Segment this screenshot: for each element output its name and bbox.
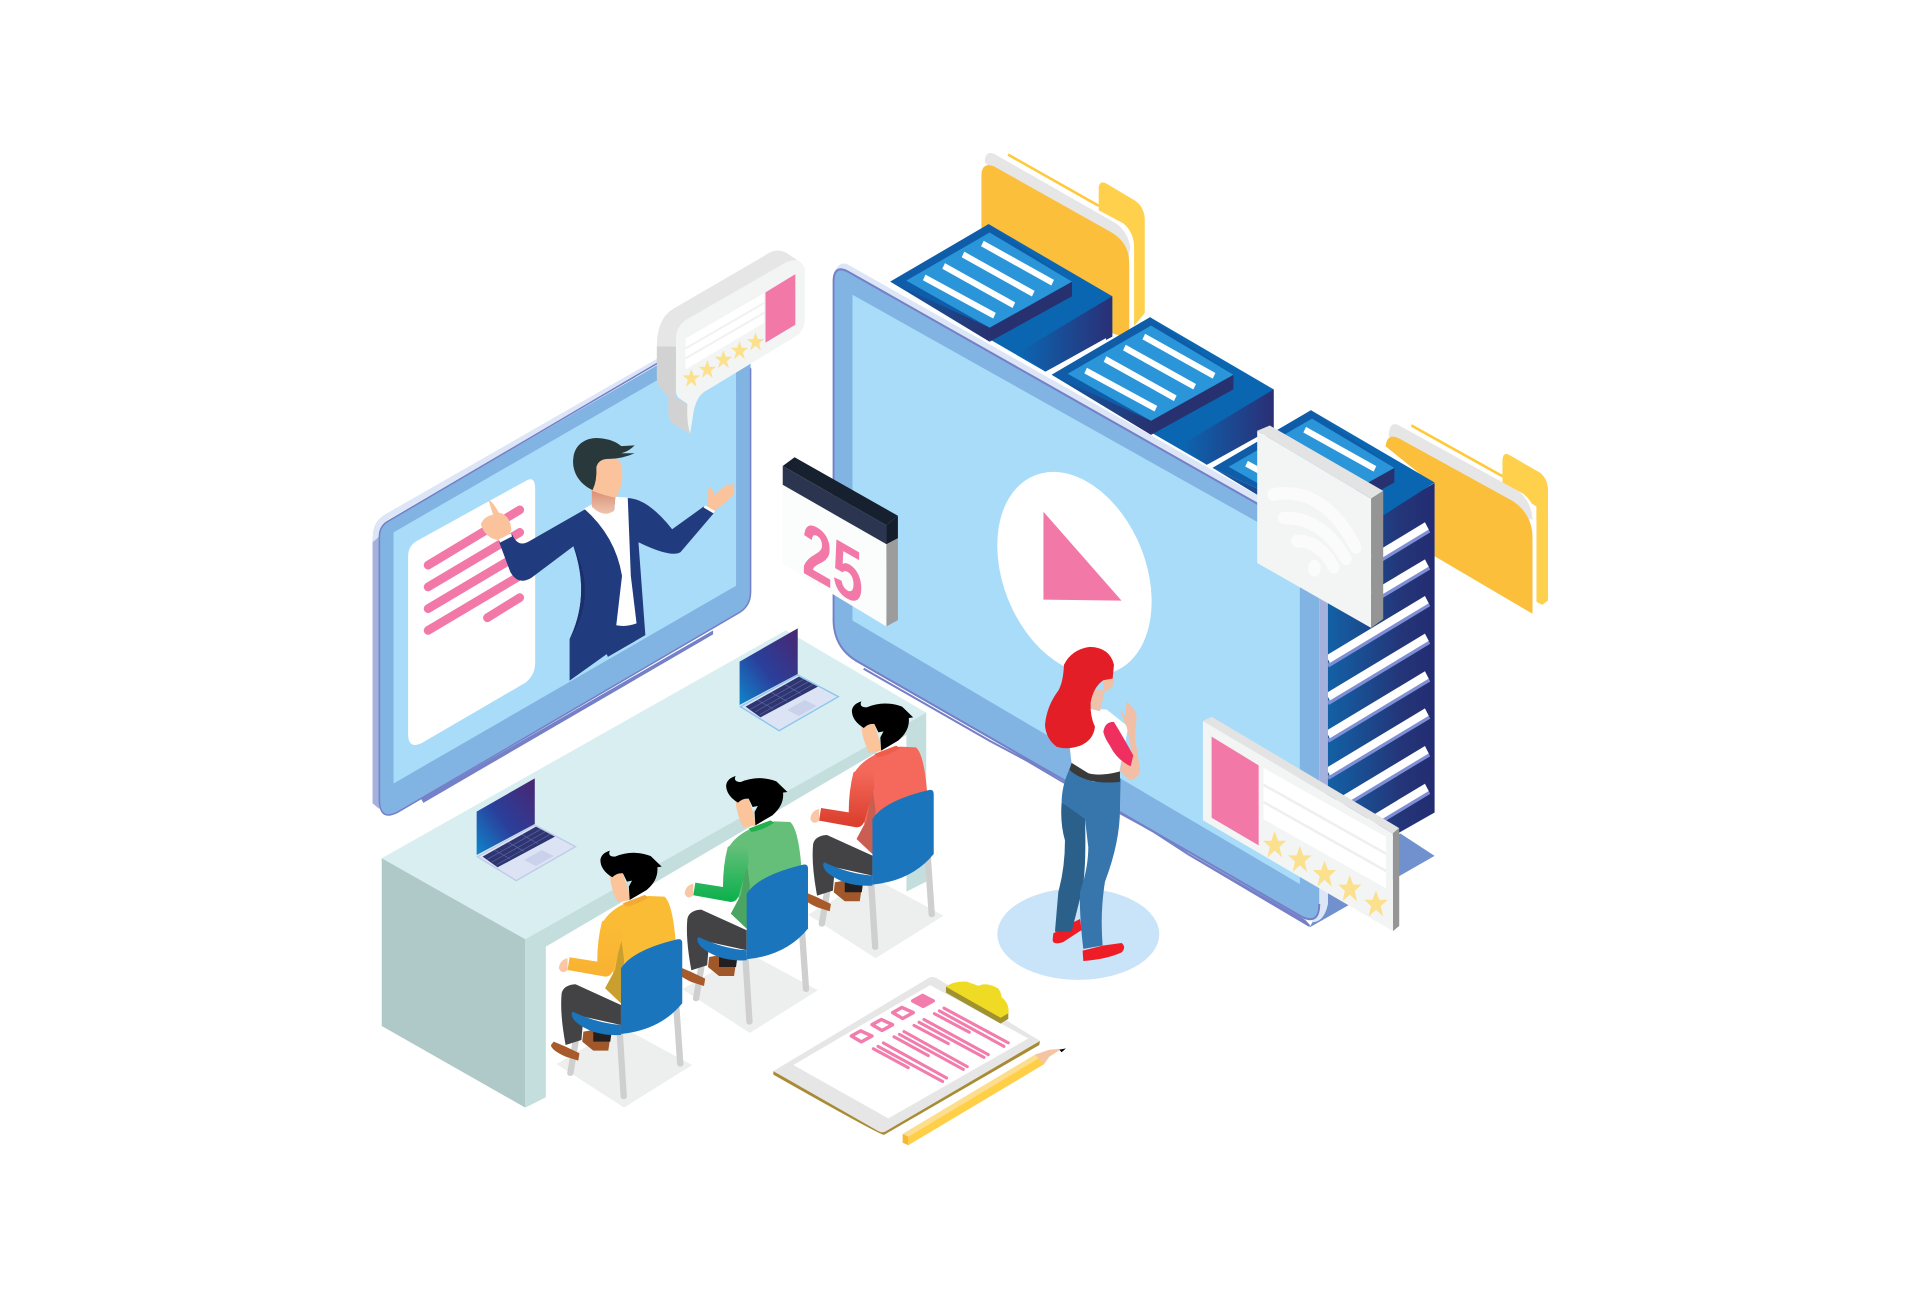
lid front right: [990, 282, 1072, 342]
torso shade: [731, 862, 750, 929]
bubble stars: [682, 332, 764, 387]
lid lines: [924, 243, 1053, 316]
lid lines: [1086, 337, 1214, 409]
server unit 3: [1213, 410, 1435, 528]
floor shadow: [1310, 833, 1435, 928]
card top: [1257, 425, 1383, 499]
server unit 2: [1052, 317, 1274, 469]
card text block: [1264, 768, 1386, 888]
checklist lines: [873, 1008, 1008, 1081]
rack slots: [1328, 526, 1429, 853]
play button circle: [967, 444, 1182, 703]
chair shadow: [557, 1027, 692, 1108]
face: [1103, 677, 1114, 692]
arm: [568, 910, 623, 977]
near foot: [551, 1042, 579, 1061]
calendar date: 25: [802, 503, 863, 623]
pencil body: [908, 1057, 1044, 1145]
card stars: [1263, 831, 1388, 917]
checked box: [913, 995, 933, 1006]
pencil: [903, 1048, 1066, 1145]
clip: [946, 982, 1009, 1019]
calendar page: [783, 485, 886, 626]
hand: [559, 958, 568, 972]
chair back: [872, 790, 934, 885]
monitor bezel: [379, 311, 751, 815]
chair legs: [696, 932, 806, 1022]
speech bubble with rating: [657, 251, 805, 434]
calendar header: [783, 466, 886, 544]
teacher figure: [481, 438, 734, 681]
unit side: [1180, 389, 1274, 465]
pencil tip: [1035, 1049, 1062, 1064]
far foot: [708, 955, 737, 976]
monitor top lip: [373, 358, 658, 542]
folder back tab: [1099, 182, 1145, 328]
panel: server, folders and right monitor: [834, 153, 1548, 931]
calendar top: [783, 457, 898, 525]
sock: [593, 1028, 612, 1042]
bubble text rules: [686, 303, 764, 358]
trousers: [687, 910, 747, 970]
laptop base: [740, 675, 838, 731]
lid lines: [1247, 430, 1375, 502]
floor circle: [997, 888, 1159, 980]
laptop screen: [740, 628, 798, 705]
teacher shirt: [584, 497, 637, 626]
near foot: [802, 892, 831, 911]
hand: [685, 884, 693, 897]
slot strip: [1044, 338, 1106, 376]
far foot: [582, 1030, 611, 1051]
far foot: [834, 881, 863, 901]
chair shadow: [682, 952, 818, 1033]
unit top: [1052, 317, 1274, 465]
laptop left: [477, 778, 575, 881]
lid face: [1229, 419, 1394, 514]
jeans front: [1062, 768, 1121, 949]
face: [610, 873, 631, 902]
slot shadows: [1328, 531, 1429, 853]
woman standing on blue base: [997, 647, 1159, 980]
chair seat: [572, 1012, 621, 1035]
laptop keyboard: [483, 827, 555, 867]
sock: [719, 954, 738, 967]
card front: [1203, 721, 1393, 931]
laptop keyboard: [746, 677, 818, 717]
collar: [749, 820, 774, 832]
trousers: [561, 984, 621, 1045]
folder top left: [981, 153, 1145, 339]
bubble left side: [657, 347, 687, 404]
hair: [726, 776, 787, 825]
student in yellow shirt: [551, 851, 692, 1108]
teacher left hand: [481, 500, 511, 540]
board: [773, 977, 1040, 1132]
card side: [1393, 828, 1399, 931]
face: [861, 723, 882, 753]
wifi card: [1257, 425, 1383, 628]
server rack column: [1324, 483, 1435, 873]
monitor bezel: [834, 269, 1319, 919]
folder paper grey: [985, 153, 1130, 287]
rating card: [1203, 717, 1399, 931]
folder yellow line: [1008, 155, 1099, 206]
laptop trackpad: [787, 700, 817, 716]
card front: [1257, 431, 1371, 628]
monitor outline: [379, 363, 751, 815]
calendar side: [886, 538, 898, 626]
folder paper white: [994, 155, 1134, 337]
teacher hair: [573, 438, 635, 490]
pencil end: [903, 1134, 908, 1145]
laptop right: [740, 628, 838, 731]
chair back: [747, 864, 808, 959]
chair seat: [697, 937, 747, 960]
torso: [727, 821, 801, 929]
arm: [693, 835, 749, 902]
monitor stand strip: [864, 669, 1310, 926]
student in green shirt: [677, 776, 818, 1033]
torso shade: [605, 937, 624, 1003]
sleeve: [1103, 722, 1133, 766]
bubble front: [676, 260, 805, 434]
teacher neck: [592, 490, 616, 514]
pencil highlight: [903, 1055, 1040, 1137]
folder right: [1386, 424, 1548, 614]
laptop trackpad: [524, 850, 554, 866]
hair: [1045, 647, 1114, 748]
chair legs: [570, 1007, 680, 1097]
bubble top side: [657, 251, 805, 347]
neck: [1091, 689, 1105, 711]
folder paper white: [1397, 427, 1536, 603]
paper: [793, 985, 1028, 1118]
belt: [1069, 763, 1120, 782]
teacher face: [592, 457, 622, 498]
teacher cuffs: [499, 505, 715, 543]
clipboard and pencil: [773, 977, 1066, 1145]
bubble text block: [686, 293, 764, 369]
card top: [1203, 717, 1399, 833]
student in red shirt: [802, 701, 944, 958]
bubble tail side: [668, 396, 690, 434]
chair shadow: [808, 877, 944, 958]
monitor screen: [394, 335, 736, 783]
laptop screen: [477, 778, 535, 855]
desk end panel: [382, 858, 525, 1108]
hair: [600, 851, 662, 900]
collar: [874, 746, 900, 757]
trousers: [813, 835, 872, 896]
chair legs: [822, 857, 932, 947]
play triangle: [1043, 512, 1121, 601]
folder front: [981, 165, 1129, 339]
lid face: [906, 233, 1072, 328]
desk with laptops: [382, 628, 926, 1108]
torso: [601, 896, 676, 1003]
teacher jacket: [499, 498, 714, 681]
folder yellow line: [1411, 425, 1502, 476]
keyboard keys: [487, 829, 550, 865]
card side: [1371, 491, 1383, 628]
keyboard keys: [750, 679, 813, 715]
bubble pink thumbnail: [766, 274, 795, 343]
hair: [852, 701, 913, 751]
monitor top lip: [836, 263, 1259, 505]
wifi dot: [1308, 560, 1321, 577]
torso: [853, 747, 927, 854]
collar: [623, 895, 649, 907]
unit side: [1019, 296, 1112, 372]
slot strip: [1205, 431, 1267, 469]
lid front right: [1312, 468, 1394, 528]
back shoe: [1053, 919, 1082, 943]
lid front left: [1052, 375, 1151, 435]
lid frame: [890, 224, 1072, 328]
card pink thumbnail: [1212, 737, 1259, 845]
arm: [819, 761, 874, 827]
monitor stand strip: [421, 630, 713, 803]
calendar body shapes: [783, 457, 898, 626]
server unit 1: [890, 224, 1112, 376]
desk front edge: [525, 713, 926, 1108]
arm and hand: [1120, 702, 1140, 780]
unit top: [890, 224, 1112, 372]
back leg: [1055, 803, 1085, 932]
jacket shading: [570, 546, 585, 639]
shirt: [1070, 709, 1128, 775]
lid front left: [890, 282, 990, 342]
unit top: [1213, 410, 1435, 525]
near foot: [677, 967, 705, 986]
card text rules: [1264, 785, 1386, 871]
monitor right lip: [1319, 590, 1328, 810]
lid front left: [1213, 468, 1312, 528]
lid frame: [1052, 317, 1233, 421]
monitor screen: [852, 295, 1300, 884]
desk top: [382, 630, 926, 939]
laptop base: [477, 825, 575, 881]
slide text lines: [428, 510, 520, 630]
slot highlights: [1328, 526, 1427, 847]
pencil lead: [1059, 1048, 1066, 1052]
folder back tab: [1502, 454, 1548, 605]
checkboxes: [851, 1007, 913, 1042]
monitor bottom corner lip: [1312, 883, 1328, 922]
hand: [810, 809, 819, 823]
front shoe: [1083, 943, 1124, 961]
folder front: [1386, 437, 1533, 614]
clip edge: [946, 987, 1008, 1024]
lid face: [1068, 326, 1233, 421]
teacher right hand: [708, 484, 734, 512]
monitor side edge: [373, 524, 379, 809]
board edge: [773, 1041, 1040, 1135]
panel: left monitor with teacher: [373, 311, 751, 815]
face: [736, 798, 757, 828]
lid frame: [1213, 410, 1394, 514]
folder paper grey: [1389, 424, 1533, 520]
calendar header side: [886, 516, 898, 544]
wifi icon: [1273, 493, 1356, 567]
chair seat: [823, 862, 872, 886]
monitor outline: [834, 269, 1319, 919]
chair back: [621, 939, 682, 1034]
lid front right: [1151, 375, 1233, 435]
slide panel: [408, 479, 535, 745]
calendar: [783, 457, 898, 626]
torso shade: [857, 787, 876, 854]
desk far leg: [906, 722, 926, 892]
sock: [845, 879, 863, 892]
